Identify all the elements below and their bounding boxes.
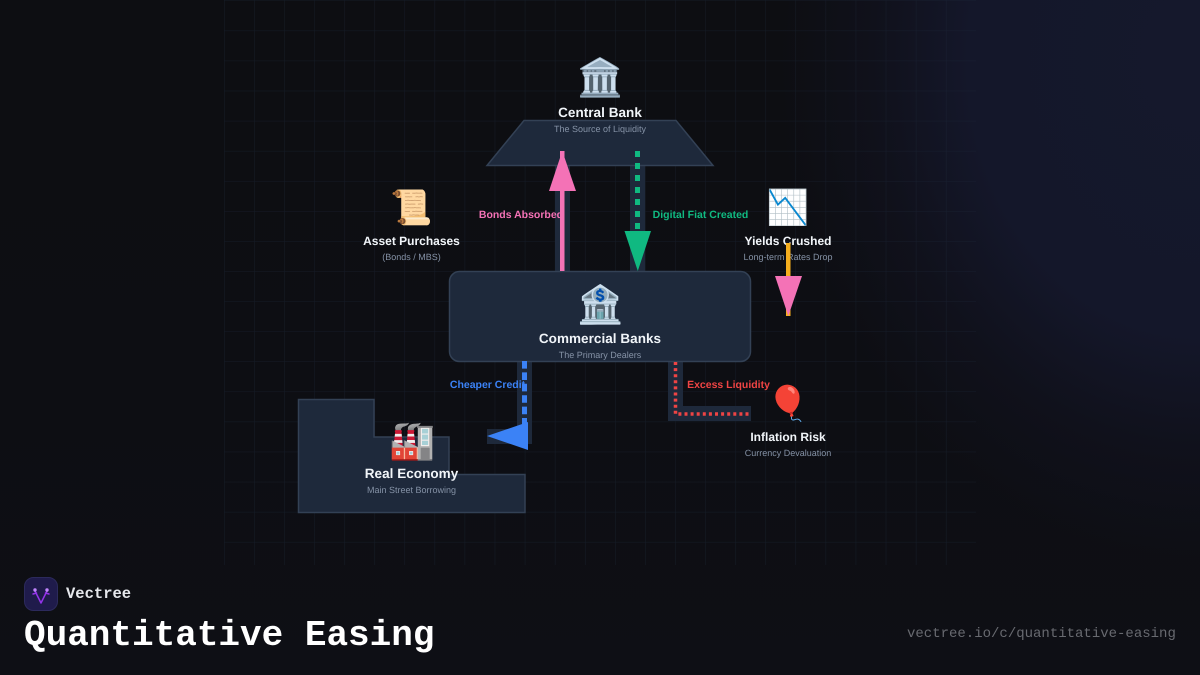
arrow: bonds absorbed	[549, 151, 576, 271]
icon: balloon: 🎈	[767, 383, 809, 424]
icon: scroll: 📜	[390, 188, 433, 228]
brand name: Vectree	[66, 585, 131, 603]
icon: factory: 🏭	[389, 420, 435, 463]
label: excess liquidity: Excess Liquidity	[687, 379, 770, 391]
footer brand	[24, 578, 131, 610]
icon: bank: 🏦	[577, 283, 623, 327]
icon: falling chart: 📉	[767, 188, 809, 228]
title: Quantitative Easing	[24, 615, 434, 656]
arrow: digital fiat	[624, 151, 651, 271]
caption: commercial banks: The Primary Dealers	[559, 350, 642, 360]
heading: real economy: Real Economy	[365, 466, 459, 481]
arrow: cheaper credit	[487, 361, 528, 450]
label: cheaper credit: Cheaper Credit	[450, 379, 526, 391]
arrow: excess liquidity	[676, 362, 751, 414]
label: digital fiat created: Digital Fiat Created	[653, 209, 748, 221]
caption: central bank: The Source of Liquidity	[554, 124, 647, 134]
heading: inflation risk: Inflation Risk	[750, 430, 826, 444]
channel: connector tracks	[487, 166, 751, 444]
node: inflation risk	[745, 383, 831, 458]
caption: inflation risk: Currency Devaluation	[745, 448, 831, 458]
icon: vectree logo	[24, 578, 58, 610]
panel: real economy	[298, 400, 525, 512]
caption: real economy: Main Street Borrowing	[367, 485, 456, 495]
label: bonds absorbed: Bonds Absorbed	[479, 209, 563, 221]
heading: commercial banks: Commercial Banks	[539, 331, 661, 346]
panel: central bank	[487, 56, 713, 166]
panel: commercial banks	[450, 272, 750, 362]
source url: vectree.io/c/quantitative-easing	[907, 626, 1176, 642]
node: asset purchases	[363, 188, 460, 262]
icon: classical building: 🏛️	[577, 56, 623, 100]
node: yields crushed	[743, 188, 833, 262]
heading: asset purchases: Asset Purchases	[363, 234, 460, 248]
heading: yields crushed: Yields Crushed	[745, 234, 831, 248]
caption: yields crushed: Long-term Rates Drop	[743, 252, 833, 262]
arrow: yields down	[775, 243, 802, 316]
caption: asset purchases: (Bonds / MBS)	[382, 252, 441, 262]
heading: central bank: Central Bank	[558, 105, 642, 120]
